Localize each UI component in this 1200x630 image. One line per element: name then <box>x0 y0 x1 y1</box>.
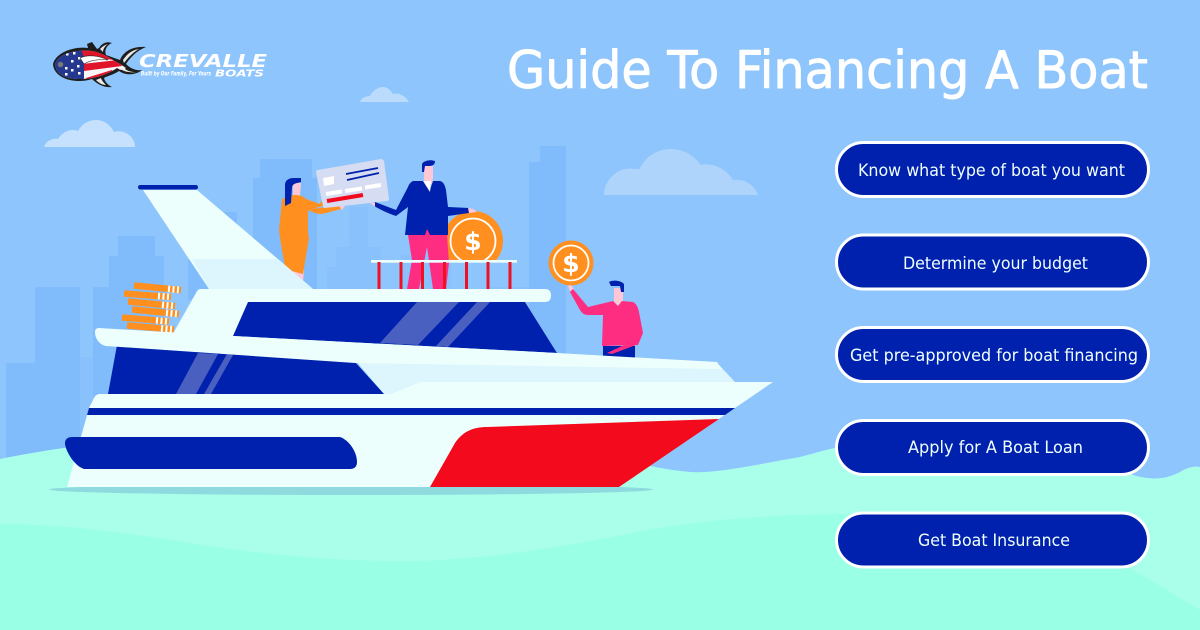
cloud: small centre <box>360 87 409 102</box>
deck band <box>95 328 722 369</box>
logo wordmark: CREVALLE <box>139 51 268 72</box>
lower window <box>108 345 384 394</box>
figure: man in pink shirt <box>568 281 643 358</box>
title: Guide To Financing A Boat <box>507 41 1148 101</box>
step 5 button: Get Boat Insurance <box>918 531 1070 551</box>
card chip <box>323 176 334 186</box>
step 1 button: Know what type of boat you want <box>858 161 1125 181</box>
coin: large <box>447 211 503 260</box>
coin: small <box>548 240 594 286</box>
coin: large: $ <box>464 227 482 256</box>
hull porthole <box>65 437 357 469</box>
upper window <box>233 302 557 353</box>
railing <box>371 260 517 290</box>
cloud: left <box>44 120 135 147</box>
step 2 button <box>836 235 1148 289</box>
step 5 button <box>836 513 1148 567</box>
credit card <box>316 159 389 208</box>
cloud: right <box>604 149 758 195</box>
lower cabin shade <box>355 360 735 394</box>
coin stack <box>122 286 181 330</box>
hull stripe <box>87 408 735 415</box>
step 3 button <box>836 328 1148 382</box>
yacht <box>65 185 773 487</box>
sea: back wave <box>0 442 1200 630</box>
step 2 button: Determine your budget <box>903 254 1088 274</box>
logo boats: BOATS <box>215 68 264 80</box>
step 4 button: Apply for A Boat Loan <box>908 438 1083 458</box>
city skyline <box>6 146 566 473</box>
hull <box>67 382 773 487</box>
coin: small: $ <box>562 249 580 278</box>
step 1 button <box>836 142 1148 196</box>
step 3 button: Get pre-approved for boat financing <box>850 346 1138 366</box>
mast fin <box>143 190 313 289</box>
figure: man in suit <box>370 160 477 289</box>
card lines <box>346 168 379 180</box>
upper cabin <box>170 289 557 353</box>
sea: front wave <box>0 514 1200 630</box>
logo fish <box>50 42 146 87</box>
mast bar <box>138 185 198 190</box>
figure: woman holding card <box>279 178 345 282</box>
red bow <box>430 419 719 487</box>
logo tagline: Built by Our Family, For Yours <box>141 72 211 78</box>
step 4 button <box>836 420 1148 474</box>
boat shadow <box>49 484 653 495</box>
logo <box>50 42 268 87</box>
